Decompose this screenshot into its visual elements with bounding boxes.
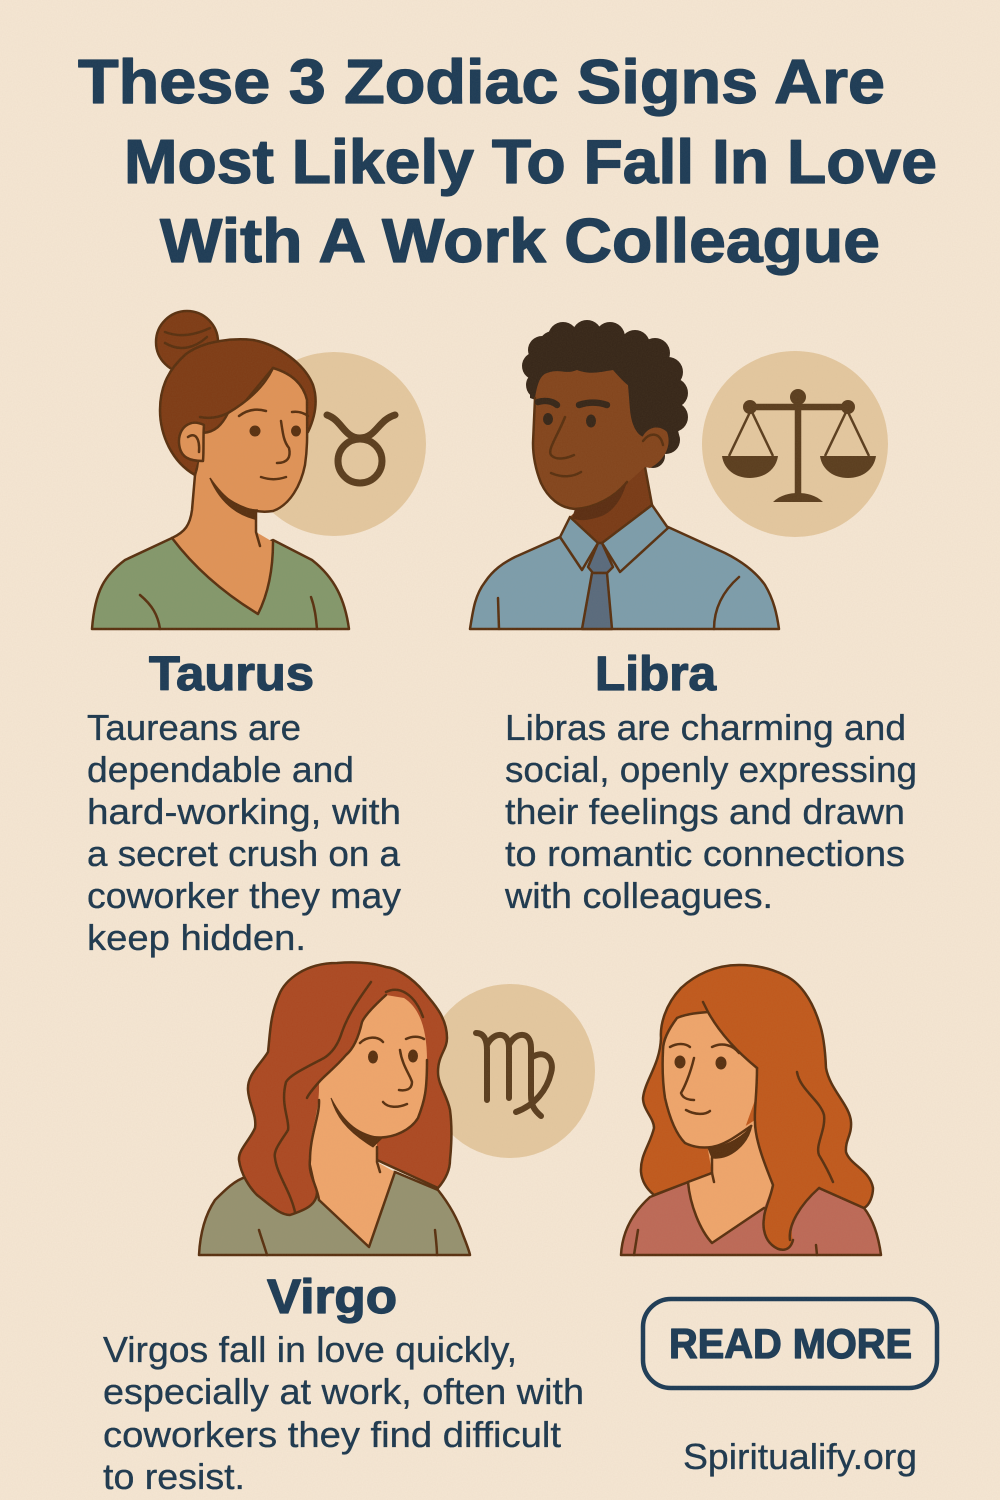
- icon: Virgo symbol circle: [425, 984, 595, 1158]
- heading: Libra: Libra: [595, 648, 716, 701]
- heading: Taurus: Taurus: [149, 648, 314, 701]
- text: Taurus description: dependable and: [87, 749, 354, 790]
- heading: Virgo: Virgo: [267, 1271, 397, 1324]
- text: Taurus description: a secret crush on a: [87, 833, 401, 874]
- source: Spiritualify.org: Spiritualify.org: [683, 1436, 917, 1477]
- text: Libra description: Libras are charming and: [505, 707, 906, 748]
- panel: Virgo: [103, 962, 881, 1497]
- text: Virgo description: Virgos fall in love quickly,: [103, 1329, 517, 1370]
- text: Libra description: social, openly expressing: [505, 749, 917, 790]
- illustration: man with curly hair and tie: [470, 320, 779, 629]
- text: Virgo description: to resist.: [103, 1456, 245, 1497]
- text: Libra description: with colleagues.: [504, 875, 773, 916]
- text: Virgo description: coworkers they find difficult: [103, 1414, 561, 1455]
- illustration: woman with wavy red hair and olive top: [199, 962, 470, 1255]
- illustration: woman with long auburn hair and pink top: [621, 965, 881, 1255]
- text: Taurus description: [87, 707, 401, 958]
- title: [78, 48, 937, 276]
- text: Taurus description: coworker they may: [87, 875, 401, 916]
- text: Taurus description: Taureans are: [87, 707, 301, 748]
- button: READ MORE: [643, 1299, 937, 1388]
- icon: Libra scales circle: [702, 351, 888, 537]
- illustration: woman with bun: [92, 311, 349, 629]
- text: Libra description: their feelings and drawn: [505, 791, 905, 832]
- panel: Taurus: [87, 311, 426, 958]
- text: Taurus description: keep hidden.: [87, 917, 306, 958]
- title: With A Work Colleague: [160, 207, 880, 276]
- text: Virgo description: [103, 1329, 584, 1497]
- text: Taurus description: hard-working, with: [87, 791, 401, 832]
- button: READ MORE: READ MORE: [669, 1320, 912, 1367]
- text: Libra description: to romantic connections: [505, 833, 905, 874]
- text: Virgo description: especially at work, often with: [103, 1371, 584, 1412]
- icon: Taurus symbol circle: [242, 352, 426, 536]
- title: These 3 Zodiac Signs Are: [78, 48, 885, 117]
- title: Most Likely To Fall In Love: [124, 128, 937, 197]
- panel: Libra: [470, 320, 917, 916]
- text: Libra description: [504, 707, 917, 916]
